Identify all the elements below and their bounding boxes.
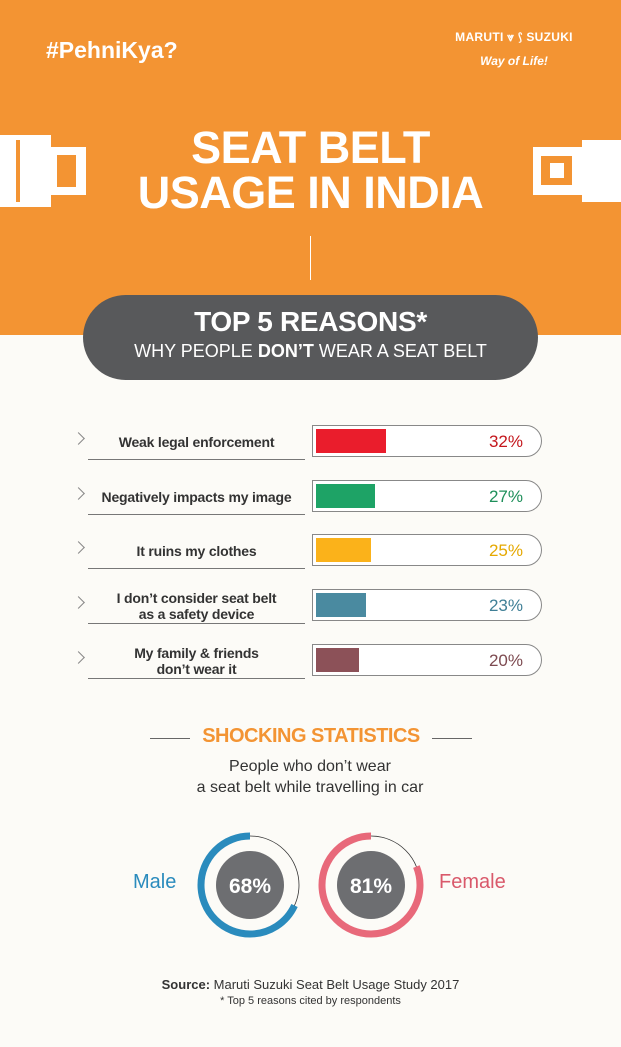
reason 3: 25% <box>489 541 523 560</box>
reason 4: 23% <box>489 596 523 615</box>
label: female: Female <box>439 871 506 893</box>
reason 5: don’t wear it <box>157 661 236 677</box>
pill: top 5 reasons heading: WHY PEOPLE DON’T WEAR A SEAT BELT <box>134 341 487 361</box>
subtext: a seat belt while travelling in car <box>197 779 423 796</box>
connector line <box>310 236 311 280</box>
chart: male donut <box>198 832 300 938</box>
label: male: Male <box>133 871 176 893</box>
pill: top 5 reasons heading: TOP 5 REASONS* <box>194 306 427 337</box>
subtext <box>197 758 424 796</box>
subtext: People who don’t wear <box>229 758 391 775</box>
logo: Maruti Suzuki: Way of Life! <box>480 54 548 68</box>
logo: Maruti Suzuki: MARUTI ⩔ ⟆ SUZUKI <box>455 30 573 44</box>
reason 1: 32% <box>489 432 523 451</box>
pill: top 5 reasons heading <box>83 295 538 380</box>
reason 4 <box>78 589 542 624</box>
reason 5: My family & friends <box>134 645 259 661</box>
reason 5: 20% <box>489 651 523 670</box>
reason 2: 27% <box>489 487 523 506</box>
reason 1 <box>78 425 542 460</box>
chart: female donut: 81% <box>350 875 392 898</box>
reason 3: It ruins my clothes <box>137 543 256 559</box>
chart: male donut: 68% <box>229 875 271 898</box>
icon: seat belt buckle right <box>533 140 621 202</box>
hashtag: #PehniKya? <box>46 37 178 63</box>
reason 5 <box>78 644 542 679</box>
reason 3 <box>78 534 542 569</box>
reason 2: Negatively impacts my image <box>102 489 291 505</box>
reason 4: as a safety device <box>139 606 254 622</box>
icon: seat belt buckle left <box>0 135 86 207</box>
heading: shocking statistics: SHOCKING STATISTICS <box>202 725 420 747</box>
reason 4: I don’t consider seat belt <box>117 590 276 606</box>
title <box>138 122 483 218</box>
orange header band <box>0 0 621 335</box>
logo: Maruti Suzuki <box>455 30 573 68</box>
reason 2 <box>78 480 542 515</box>
chart: female donut <box>318 832 424 938</box>
footnote: * Top 5 reasons cited by respondents <box>220 995 401 1007</box>
title: USAGE IN INDIA <box>138 167 483 218</box>
reason 1: Weak legal enforcement <box>119 434 274 450</box>
source: Source: Maruti Suzuki Seat Belt Usage Study 2017 <box>162 977 459 992</box>
title: SEAT BELT <box>191 122 430 173</box>
